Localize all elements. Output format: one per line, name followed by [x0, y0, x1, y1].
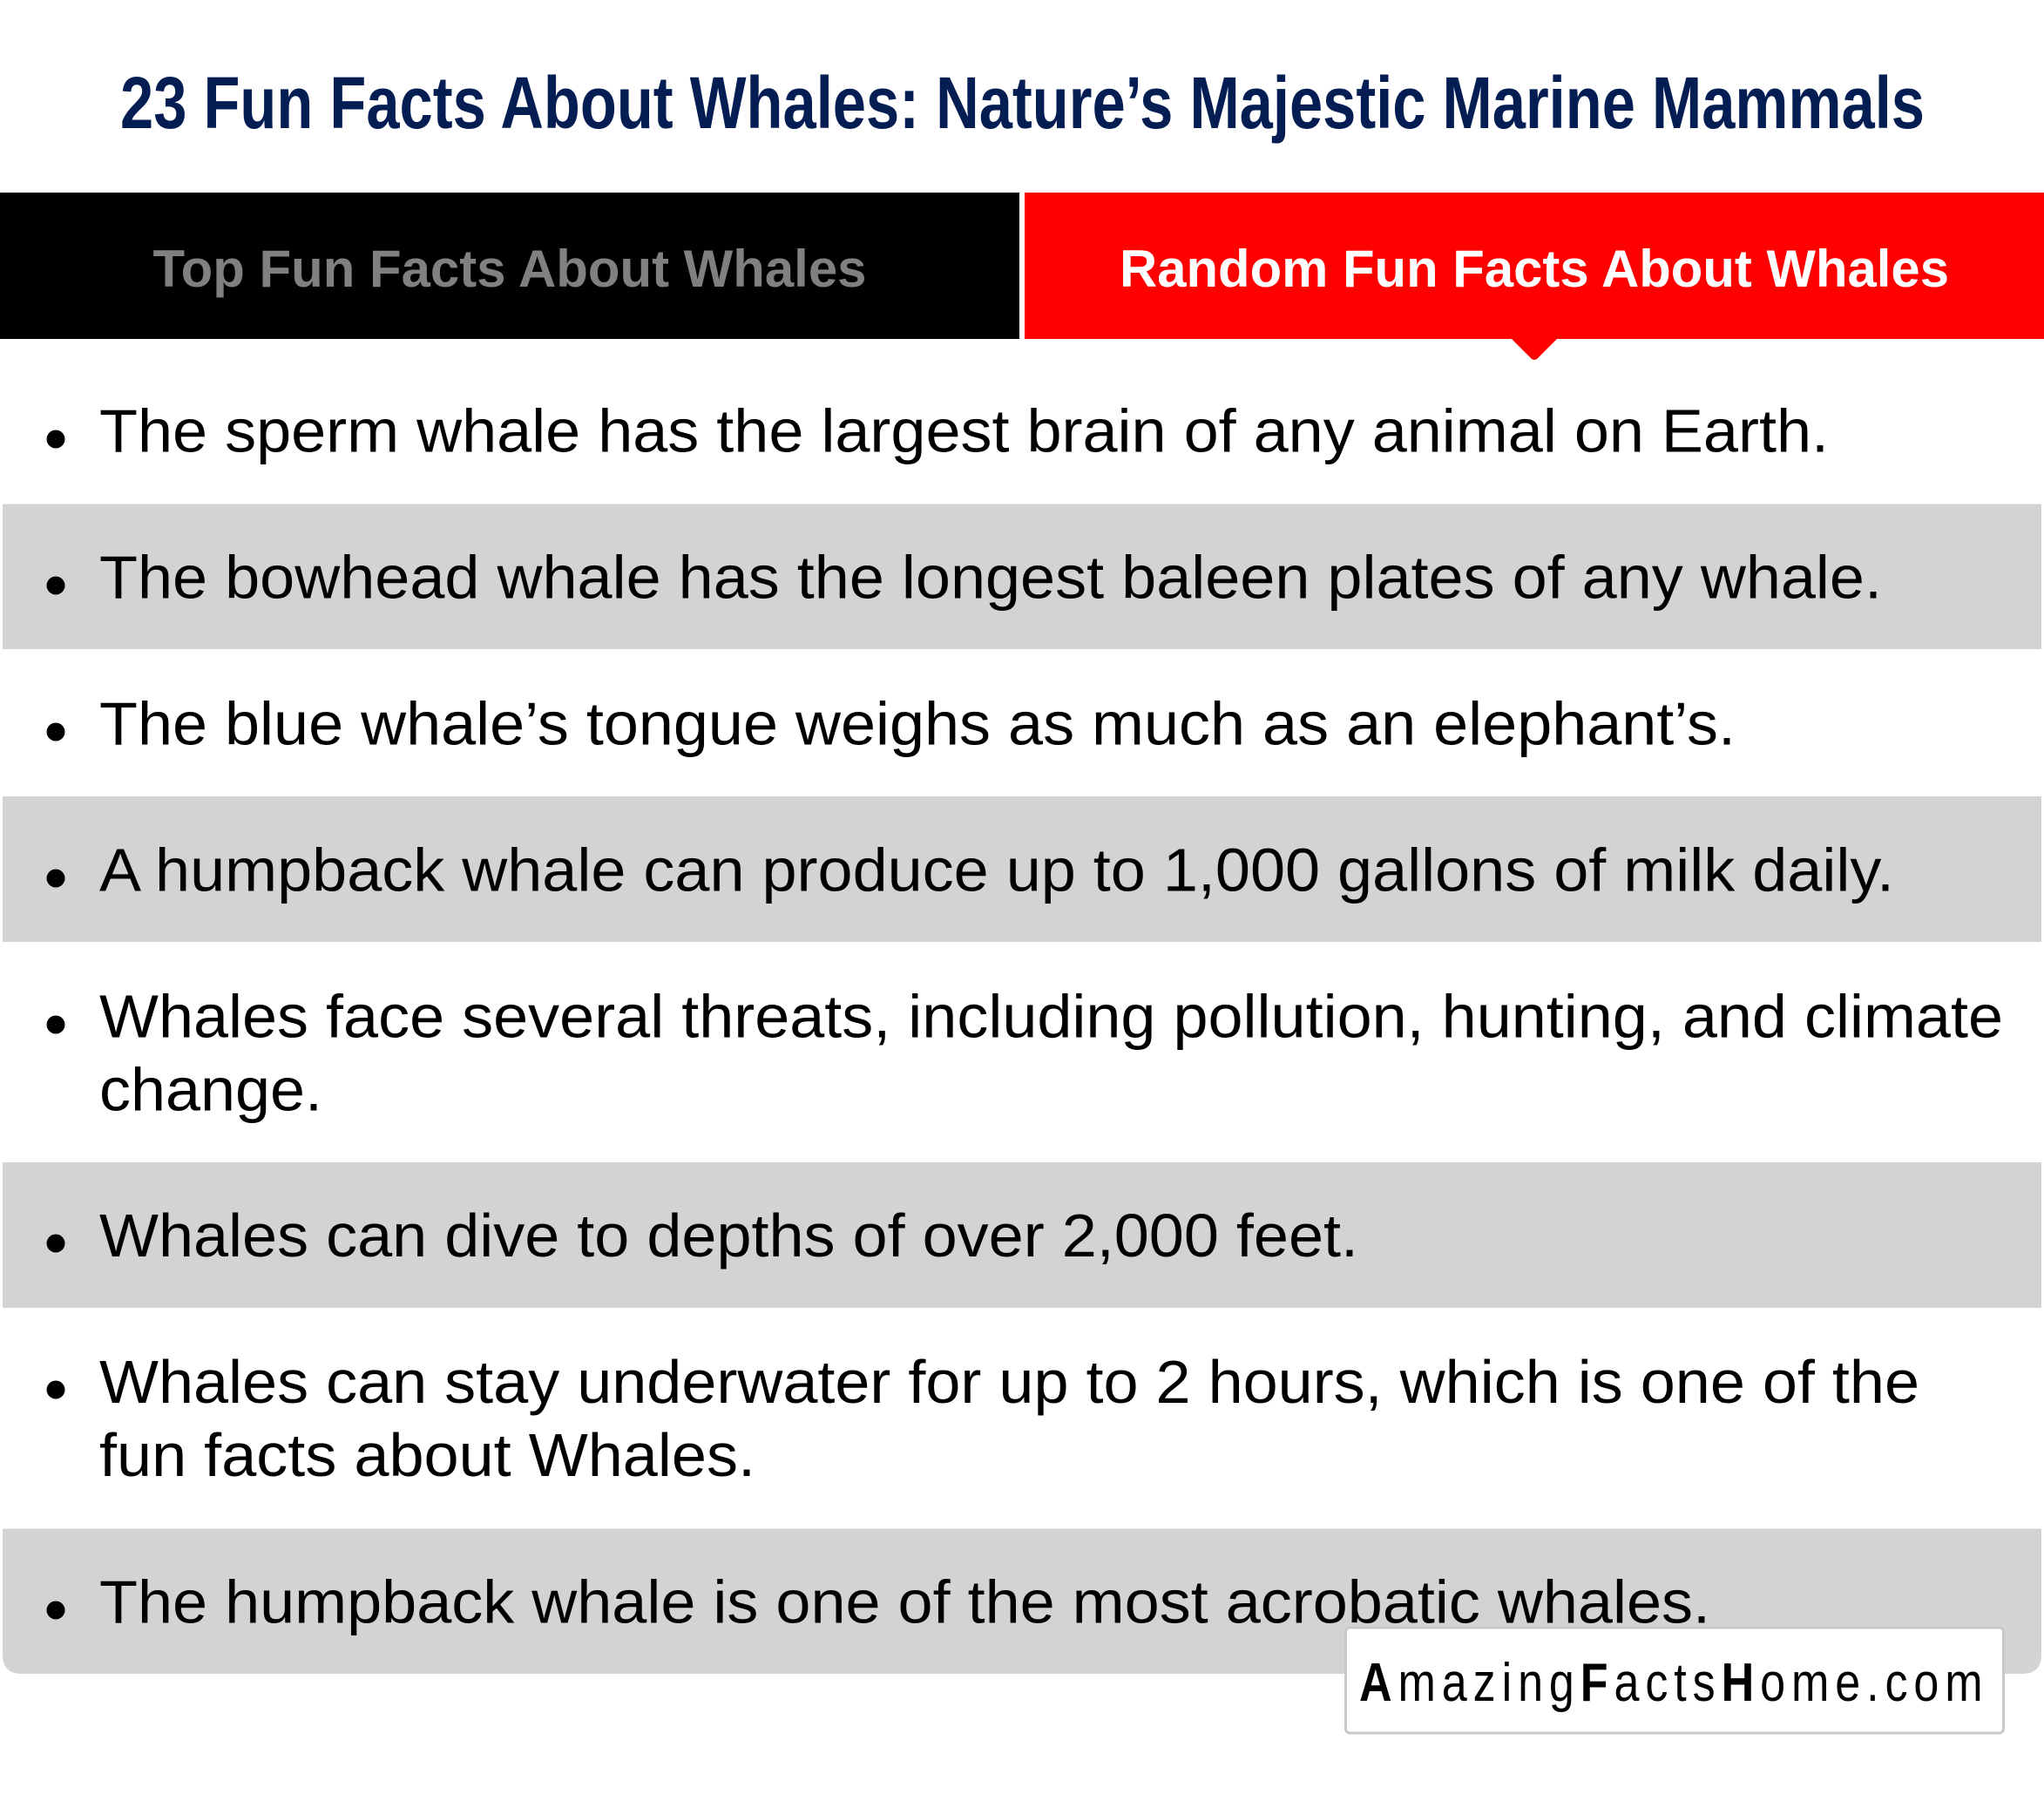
fact row 2 — [3, 504, 2041, 649]
fact row 4 — [3, 796, 2041, 942]
fact row 1: The sperm whale has the largest brain of any animal on Earth. — [99, 397, 1829, 465]
watermark: AmazingFactsHome.com — [1359, 1653, 1983, 1713]
fact row 6 — [3, 1162, 2041, 1308]
fact row 7: fun facts about Whales. — [99, 1421, 755, 1489]
fact row 6: Whales can dive to depths of over 2,000 feet. — [99, 1202, 1358, 1270]
tab: top fun facts — [0, 193, 1019, 339]
fact row 7 — [47, 1348, 1919, 1489]
tab: random fun facts — [1025, 193, 2044, 360]
fact row 8: The humpback whale is one of the most acrobatic whales. — [99, 1568, 1710, 1636]
tab: top fun facts: Top Fun Facts About Whales — [153, 240, 866, 298]
fact row 2: The bowhead whale has the longest baleen plates of any whale. — [99, 544, 1882, 612]
fact row 3: The blue whale’s tongue weighs as much as an elephant’s. — [99, 690, 1736, 758]
watermark — [1345, 1628, 2004, 1733]
fact row 5 — [47, 983, 2003, 1124]
fact row 5: Whales face several threats, including pollution, hunting, and climate — [99, 983, 2003, 1051]
fact row 4: A humpback whale can produce up to 1,000 gallons of milk daily. — [99, 836, 1894, 904]
fact row 8 — [3, 1528, 2041, 1674]
fact row 7: Whales can stay underwater for up to 2 hours, which is one of the — [99, 1348, 1919, 1416]
fact row 5: change. — [99, 1056, 322, 1124]
tab: random fun facts: Random Fun Facts About Whales — [1120, 240, 1949, 298]
